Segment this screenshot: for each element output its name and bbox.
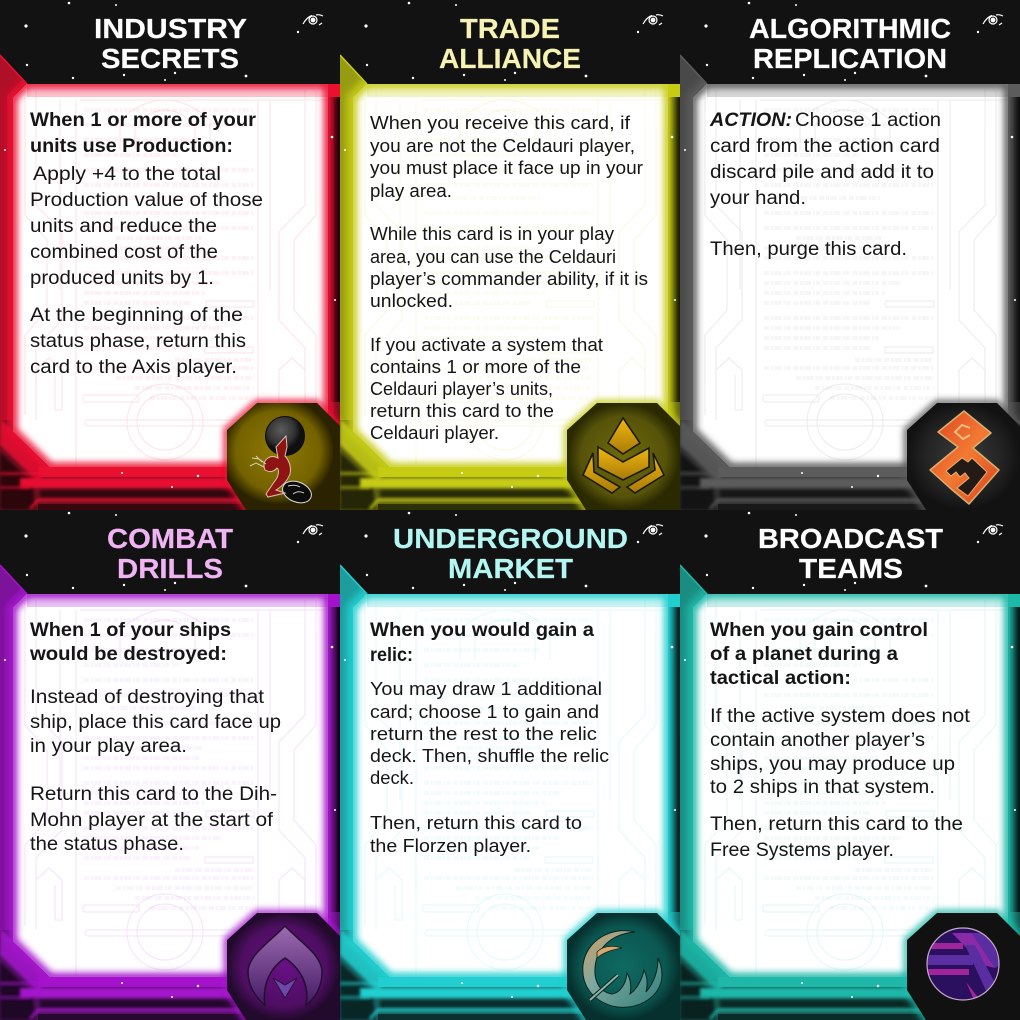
badge: purple striped disc <box>907 913 1020 1020</box>
title: COMBAT <box>107 523 233 554</box>
rules text: return this card to the <box>370 401 554 421</box>
rules text: Production value of those <box>30 190 263 211</box>
rules text: card to the Axis player. <box>30 357 237 378</box>
title <box>393 523 628 584</box>
rules text body: the Florzen player. <box>370 836 531 856</box>
rules text: If you activate a system that <box>370 335 603 355</box>
rules text: player’s commander ability, if it is <box>370 269 648 289</box>
rules text: would be destroyed: <box>29 644 227 665</box>
card frame <box>0 0 340 510</box>
rules text <box>30 110 263 378</box>
badge: teal crescent <box>567 913 680 1020</box>
badge: gold chevrons <box>567 403 680 510</box>
card frame <box>0 510 340 1020</box>
card: Industry Secrets <box>0 0 340 510</box>
card frame <box>680 510 1020 1020</box>
badge: purple flame <box>227 913 340 1020</box>
rules text <box>370 113 648 443</box>
rules text: Celdauri player. <box>370 423 499 443</box>
card frame <box>340 510 680 1020</box>
title <box>439 13 581 74</box>
rules text: the status phase. <box>30 834 184 855</box>
rules text body: You may draw 1 additional <box>370 679 602 699</box>
rules text: area, you can use the Celdauri <box>370 247 616 267</box>
card frame <box>680 0 1020 510</box>
card: Trade Alliance <box>340 0 680 510</box>
title: DRILLS <box>117 553 223 584</box>
rules text <box>709 110 941 260</box>
rules text: your hand. <box>710 188 806 209</box>
rules text: While this card is in your play <box>370 224 614 244</box>
rules text <box>710 620 971 861</box>
rules text: in your play area. <box>30 736 187 757</box>
rules text: Instead of destroying that <box>30 687 265 708</box>
rules text: unlocked. <box>370 291 453 311</box>
badge: orange glyph <box>907 403 1020 510</box>
rules text: tactical action: <box>710 668 851 689</box>
title: ALGORITHMIC <box>749 13 951 44</box>
rules text: Then, purge this card. <box>710 239 907 260</box>
rules text: contain another player’s <box>710 730 925 751</box>
rules text: status phase, return this <box>30 331 246 352</box>
rules text: When you would gain a <box>370 620 594 641</box>
rules text: Then, return this card to the <box>710 814 963 835</box>
rules text: When you gain control <box>710 620 928 641</box>
rules text: Choose 1 action <box>795 110 941 131</box>
title <box>758 523 943 584</box>
card: Underground Market <box>340 510 680 1020</box>
rules text: play area. <box>370 181 452 201</box>
rules text: produced units by 1. <box>30 268 214 289</box>
rules text: ship, place this card face up <box>30 712 281 733</box>
title: TRADE <box>460 13 560 44</box>
title: ALLIANCE <box>439 43 581 74</box>
title: REPLICATION <box>753 43 947 74</box>
rules text body: deck. <box>370 768 414 788</box>
title: SECRETS <box>101 43 239 74</box>
rules text: Free Systems player. <box>710 840 894 861</box>
rules text: When you receive this card, if <box>370 113 631 133</box>
card frame <box>340 0 680 510</box>
title: MARKET <box>448 553 573 584</box>
rules text: discard pile and add it to <box>710 162 934 183</box>
title: UNDERGROUND <box>393 523 628 554</box>
title: BROADCAST <box>758 523 943 554</box>
rules text: card from the action card <box>710 136 940 157</box>
card: Algorithmic Replication <box>680 0 1020 510</box>
rules text body <box>370 679 609 856</box>
title <box>107 523 233 584</box>
rules text body: Then, return this card to <box>370 813 582 833</box>
rules text: If the active system does not <box>710 706 971 727</box>
rules text: Celdauri player’s units, <box>370 379 553 399</box>
card: Broadcast Teams <box>680 510 1020 1020</box>
card: Combat Drills <box>0 510 340 1020</box>
rules text: to 2 ships in that system. <box>710 777 935 798</box>
rules text body: return the rest to the relic <box>370 724 597 744</box>
rules text: At the beginning of the <box>30 305 243 326</box>
rules text: you must place it face up in your <box>370 158 643 178</box>
rules text <box>29 620 281 855</box>
title <box>749 13 951 74</box>
rules text: Apply +4 to the total <box>33 164 221 185</box>
rules text: units use Production: <box>30 136 233 157</box>
rules text body: deck. Then, shuffle the relic <box>370 746 609 766</box>
rules text: Return this card to the Dih- <box>30 784 277 805</box>
title: TEAMS <box>799 553 903 584</box>
rules text: of a planet during a <box>710 644 898 665</box>
title: INDUSTRY <box>94 13 247 44</box>
rules text: you are not the Celdauri player, <box>370 136 635 156</box>
rules text: units and reduce the <box>30 216 217 237</box>
rules text body: card; choose 1 to gain and <box>370 702 599 722</box>
rules text: Mohn player at the start of <box>30 810 274 831</box>
rules text <box>370 620 594 666</box>
rules text: ACTION: <box>709 110 792 131</box>
rules text: relic: <box>370 645 413 666</box>
rules text: contains 1 or more of the <box>370 357 581 377</box>
rules text: ships, you may produce up <box>710 754 955 775</box>
rules text: combined cost of the <box>30 242 218 263</box>
title <box>94 13 247 74</box>
rules text: When 1 or more of your <box>30 110 257 131</box>
rules text: When 1 of your ships <box>30 620 231 641</box>
badge: ant carrying a sphere <box>227 403 340 510</box>
